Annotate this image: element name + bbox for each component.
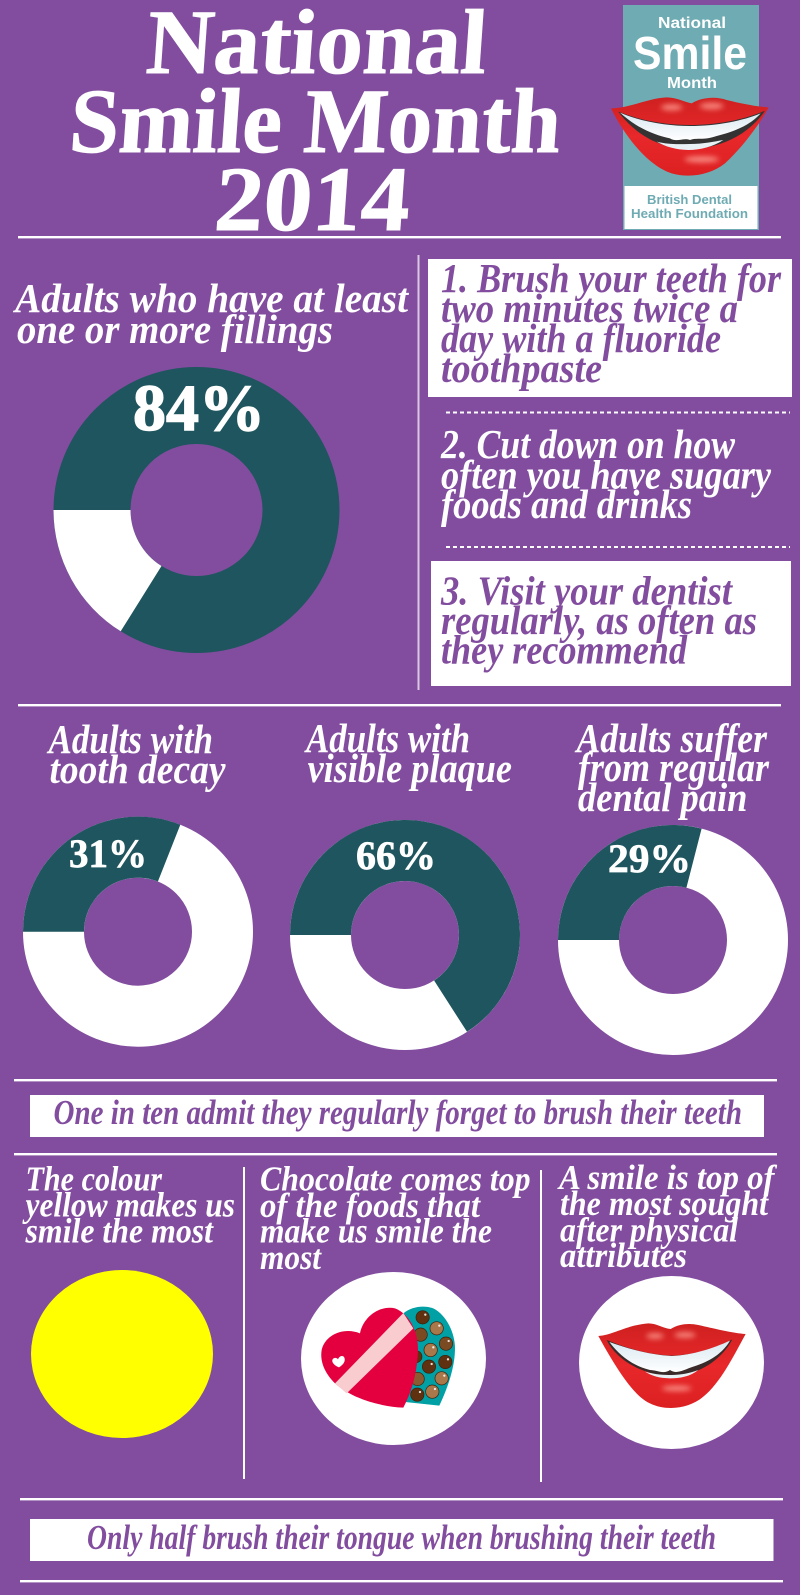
tip 1: [428, 255, 792, 397]
text: chocolate: Chocolate comes top: [260, 1160, 531, 1199]
text: smile: A smile is top of: [557, 1158, 778, 1197]
text: chocolate: [260, 1160, 531, 1277]
tip 1: toothpaste: [441, 345, 602, 391]
text: smile: attributes: [560, 1236, 687, 1275]
heading: adults with fillings: [12, 275, 410, 352]
donut chart: 84%: [53, 372, 301, 631]
title: [67, 0, 565, 250]
tip 3: regularly, as often as: [441, 597, 757, 643]
heading: dental pain: [574, 715, 770, 820]
heading: visible plaque: Adults with: [303, 715, 470, 761]
text: yellow: [22, 1160, 235, 1251]
tip 2: [440, 421, 772, 527]
tip 2: 2. Cut down on how: [440, 421, 736, 467]
logo: National Smile Month, British Dental Health Foundation: Health Foundation: [631, 206, 748, 221]
icon: yellow circle: [31, 1270, 213, 1438]
heading: dental pain: Adults suffer: [574, 715, 768, 761]
tip 3: 3. Visit your dentist: [440, 568, 733, 614]
text: smile: [557, 1158, 778, 1275]
donut chart: 31%: [23, 817, 222, 1016]
logo: National Smile Month, British Dental Health Foundation: [611, 5, 769, 230]
text: yellow: The colour: [26, 1160, 162, 1199]
logo: National Smile Month, British Dental Health Foundation: Smile: [633, 27, 747, 79]
heading: dental pain: dental pain: [578, 774, 748, 820]
icon: heart chocolate box: [301, 1272, 486, 1445]
tip 1: two minutes twice a: [441, 285, 738, 331]
text: chocolate: make us smile the: [260, 1212, 492, 1251]
logo: National Smile Month, British Dental Health Foundation: National: [658, 15, 726, 32]
tip 2: foods and drinks: [441, 481, 692, 527]
donut chart: 66%: [290, 820, 520, 1032]
donut chart: 66%: 66%: [356, 833, 436, 878]
text: smile: the most sought: [560, 1184, 769, 1223]
logo: National Smile Month, British Dental Health Foundation: British Dental: [647, 192, 732, 207]
donut chart: 31%: 31%: [69, 831, 147, 876]
heading: adults with fillings: one or more fillings: [17, 306, 333, 352]
donut chart: 29%: 29%: [608, 836, 691, 881]
heading: tooth decay: [46, 716, 226, 792]
donut chart: 84%: 84%: [133, 372, 265, 445]
title: Smile Month: [67, 70, 565, 172]
heading: dental pain: from regular: [578, 744, 770, 790]
heading: visible plaque: [303, 715, 512, 791]
heading: tooth decay: tooth decay: [50, 746, 226, 792]
text: chocolate: most: [260, 1238, 322, 1277]
icon: smiling lips: [579, 1276, 764, 1449]
tip 1: day with a fluoride: [441, 315, 721, 361]
text: yellow: smile the most: [25, 1212, 214, 1251]
donut chart: 29%: [558, 825, 758, 1024]
tip 3: [431, 561, 791, 686]
text: yellow: yellow makes us: [22, 1186, 235, 1225]
title: 2014: [212, 148, 414, 250]
tip 3: they recommend: [441, 626, 687, 672]
heading: tooth decay: Adults with: [46, 716, 213, 762]
heading: adults with fillings: Adults who have at least: [12, 275, 410, 321]
text: chocolate: of the foods that: [260, 1186, 481, 1225]
heading: visible plaque: visible plaque: [308, 745, 512, 791]
logo: National Smile Month, British Dental Health Foundation: Month: [667, 75, 717, 92]
text: smile: after physical: [560, 1211, 738, 1250]
